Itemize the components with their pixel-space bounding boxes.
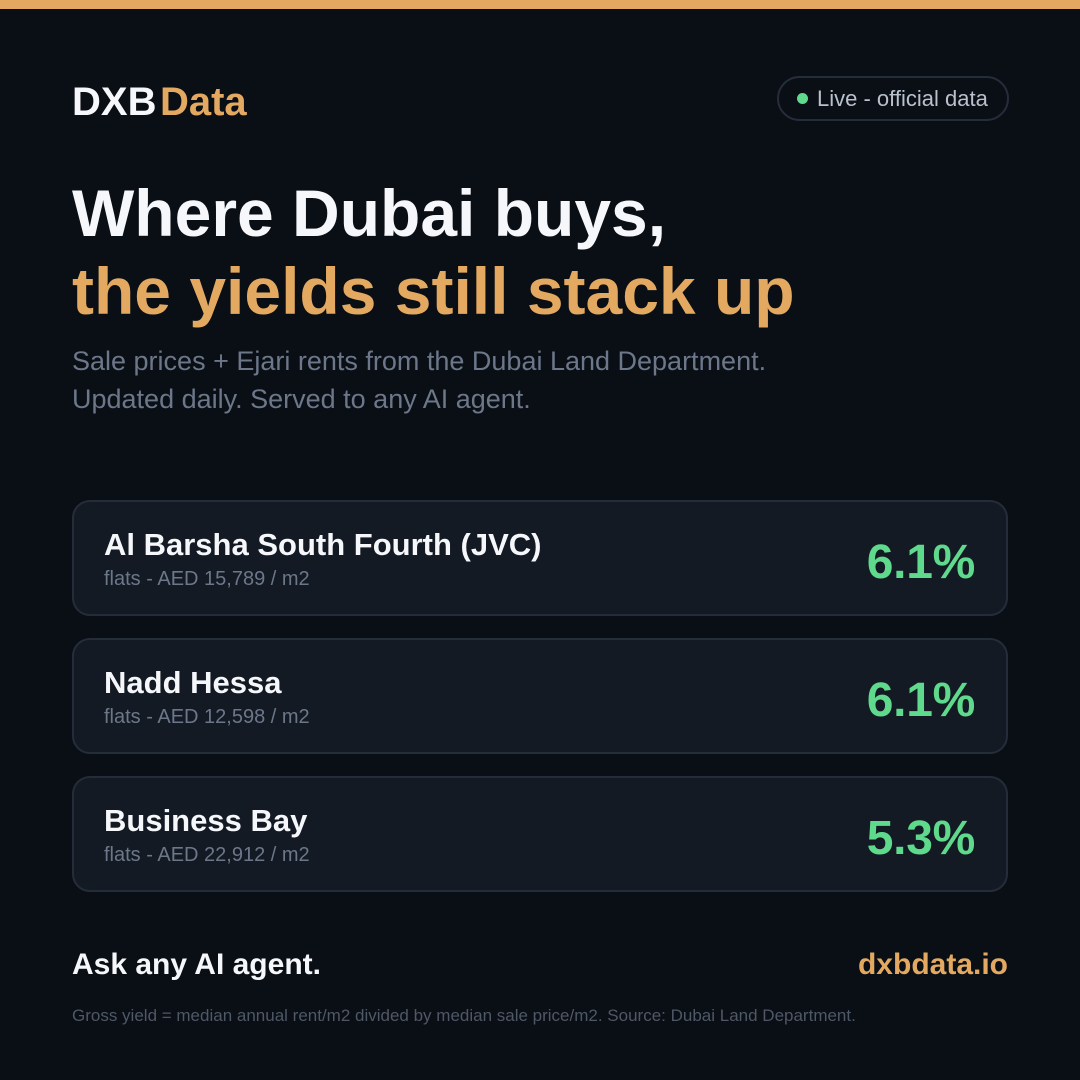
live badge bbox=[777, 76, 1009, 121]
call to action: Ask any AI agent. bbox=[72, 948, 321, 981]
title: Where Dubai buys, bbox=[72, 176, 666, 250]
area details: flats - AED 15,789 / m2 bbox=[104, 568, 310, 590]
badge text: Live - official data bbox=[817, 86, 988, 111]
title: the yields still stack up bbox=[72, 254, 795, 328]
area name: Al Barsha South Fourth (JVC) bbox=[104, 527, 541, 562]
area name: Business Bay bbox=[104, 803, 307, 838]
subtitle: Sale prices + Ejari rents from the Dubai Land Department. bbox=[72, 346, 766, 376]
subtitle: Updated daily. Served to any AI agent. bbox=[72, 384, 531, 414]
panel: Business Bay bbox=[72, 776, 1008, 892]
title bbox=[72, 176, 795, 328]
status dot bbox=[797, 93, 808, 104]
logo: DXBData bbox=[72, 80, 247, 124]
yield value: 6.1% bbox=[867, 536, 975, 589]
yield value: 6.1% bbox=[867, 674, 975, 727]
area name: Nadd Hessa bbox=[104, 665, 281, 700]
panel: Nadd Hessa bbox=[72, 638, 1008, 754]
yield value: 5.3% bbox=[867, 812, 975, 865]
footnote: Gross yield = median annual rent/m2 divided by median sale price/m2. Source: Dubai Land Department. bbox=[72, 1006, 856, 1025]
area details: flats - AED 12,598 / m2 bbox=[104, 706, 310, 728]
subtitle bbox=[72, 346, 766, 414]
panel: Al Barsha South Fourth bbox=[72, 500, 1008, 616]
area details: flats - AED 22,912 / m2 bbox=[104, 844, 310, 866]
website: dxbdata.io bbox=[858, 948, 1008, 981]
top accent bar bbox=[0, 0, 1080, 9]
